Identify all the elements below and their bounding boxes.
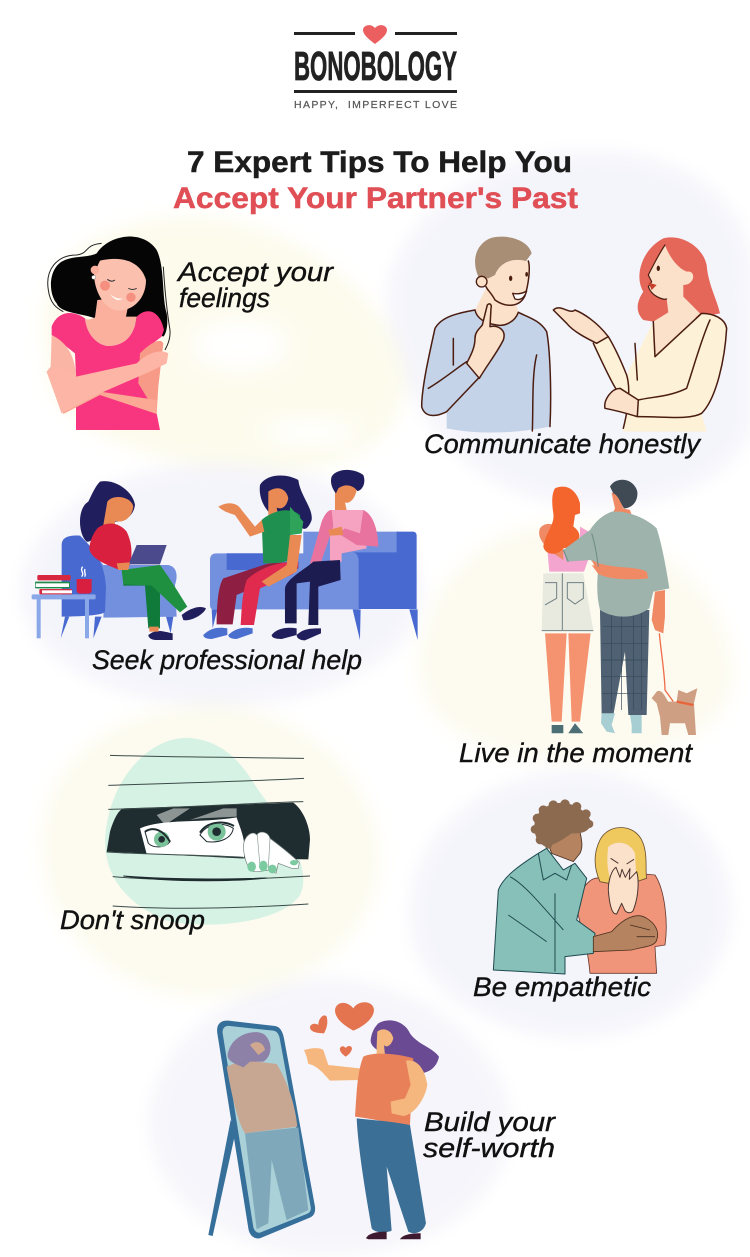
logo	[294, 25, 457, 111]
curly hair	[531, 799, 593, 849]
label: Seek professional help: Seek professional help	[92, 645, 362, 675]
man	[563, 480, 673, 733]
label: Live in the moment: Live in the moment	[459, 738, 694, 768]
title: 7 Expert Tips To Help You	[187, 146, 572, 179]
logo: BONOBOLOGY	[294, 43, 457, 89]
label: Accept your feelings	[176, 257, 334, 313]
label: Build your self-worth: Build your	[424, 1107, 556, 1137]
woman	[553, 237, 727, 432]
icon: heart	[363, 25, 387, 44]
icon: hearts	[310, 1002, 374, 1057]
label: Don't snoop: Don't snoop	[60, 905, 205, 935]
illustration: couple from behind with dog	[539, 480, 697, 735]
sofa	[210, 532, 418, 640]
title	[173, 146, 578, 215]
mint blob	[105, 738, 303, 925]
man	[422, 237, 551, 433]
label: Communicate honestly: Communicate honestly	[424, 429, 701, 459]
woman in green	[203, 475, 312, 639]
woman	[304, 1020, 439, 1239]
illustration: man comforting crying woman	[493, 799, 666, 974]
illustration: woman and mirror with hearts	[208, 1002, 439, 1239]
armchair	[61, 536, 177, 638]
label: Build your self-worth	[423, 1107, 556, 1163]
side table	[32, 567, 96, 638]
woman	[539, 487, 648, 733]
illustration: eyes peeking through blinds	[107, 755, 310, 908]
therapist	[80, 481, 206, 640]
illustration: woman hugging herself	[47, 237, 170, 430]
dog	[652, 688, 697, 735]
woman	[577, 827, 666, 973]
title: Accept Your Partner's Past	[173, 182, 578, 215]
man in pink	[272, 470, 378, 640]
man	[493, 799, 658, 974]
label: Accept your feelings: feelings	[179, 283, 270, 313]
label: Be empathetic: Be empathetic	[473, 972, 652, 1002]
logo: HAPPY, IMPERFECT LOVE	[294, 99, 457, 111]
mirror	[208, 1021, 315, 1238]
label: Accept your feelings: Accept your	[176, 257, 334, 287]
illustration: couple talking	[422, 237, 727, 433]
label: Build your self-worth: self-worth	[423, 1133, 555, 1163]
illustration: therapy session on sofas	[32, 470, 418, 640]
